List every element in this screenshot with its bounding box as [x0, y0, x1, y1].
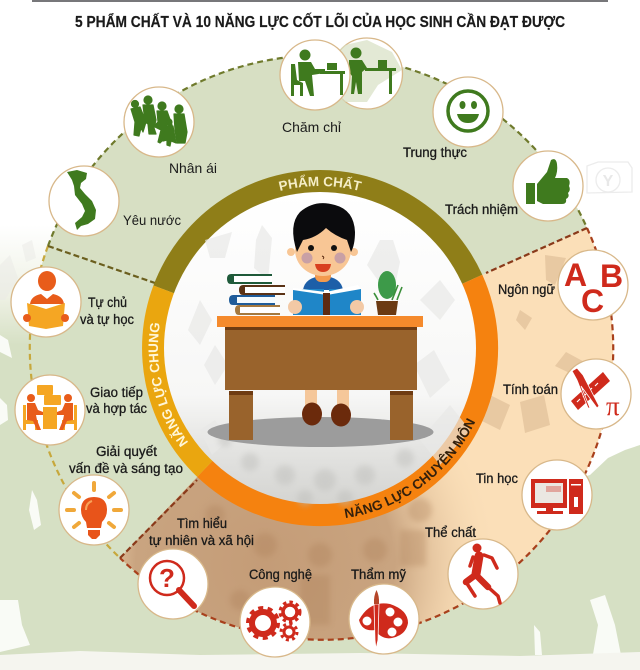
ring segment: phẩm chất — [153, 170, 482, 348]
label: chăm chỉ: Chăm chỉ — [282, 119, 342, 135]
dashed outer circle: red arc — [120, 228, 613, 640]
icon: nhân ái — [124, 87, 194, 157]
sector dividers — [48, 228, 587, 558]
icon: trung thực — [433, 77, 503, 147]
icon: giao tiếp và hợp tác — [15, 375, 85, 445]
label: tự chủ và tự học: Tự chủ — [88, 295, 127, 310]
sector: năng lực chuyên môn (specialised competencies) — [120, 228, 613, 640]
icon: giải quyết vấn đề (light bulb) — [59, 475, 129, 545]
watermark — [587, 162, 632, 193]
ring label: năng lực chung: NĂNG LỰC CHUNG — [148, 323, 188, 448]
dashed outer circle: green arc — [48, 55, 587, 246]
label: yêu nước: Yêu nước — [123, 212, 181, 228]
desk shadow — [208, 417, 434, 447]
label: thể chất: Thể chất — [425, 525, 476, 540]
title: 5 PHẨM CHẤT VÀ 10 NĂNG LỰC CỐT LÕI CỦA HỌC SINH CẦN ĐẠT ĐƯỢC — [75, 11, 565, 31]
label: giao tiếp và hợp tác: và hợp tác — [86, 401, 147, 416]
sector: năng lực chung (general competencies) — [30, 246, 320, 558]
label: tìm hiểu tự nhiên và xã hội: Tìm hiểu — [177, 516, 227, 531]
label: giao tiếp và hợp tác: Giao tiếp — [90, 385, 143, 400]
plant — [374, 271, 402, 315]
label: giải quyết vấn đề và sáng tạo — [69, 444, 183, 476]
icon: công nghệ (gears) — [240, 587, 310, 657]
icon: tự chủ và tự học — [11, 267, 81, 337]
inner background caps — [188, 225, 470, 465]
icon: ngôn ngữ (ABC): B — [600, 258, 623, 294]
icon: tính toán (ruler, compass and pi): π — [606, 391, 620, 421]
icon: thể chất (runner) — [448, 539, 518, 609]
top rule — [32, 0, 608, 2]
icon: chăm chỉ, left student — [280, 40, 350, 110]
crowd inside the circle — [218, 433, 414, 506]
label: tự chủ và tự học: và tự học — [80, 312, 134, 327]
icon: tìm hiểu (magnifier with question mark) — [138, 549, 208, 619]
label: giao tiếp và hợp tác — [86, 385, 147, 416]
boy and desk illustration — [217, 203, 423, 440]
label: tìm hiểu tự nhiên và xã hội — [149, 516, 254, 548]
label: giải quyết vấn đề và sáng tạo: Giải quyết — [96, 444, 157, 459]
label: giải quyết vấn đề và sáng tạo: vấn đề và sáng tạo — [69, 461, 183, 476]
label: công nghệ: Công nghệ — [249, 567, 312, 582]
label: thẩm mỹ: Thẩm mỹ — [351, 567, 406, 582]
icon: yêu nước (map of Vietnam) — [49, 166, 119, 236]
icon: thẩm mỹ (palette and brush) — [349, 584, 419, 654]
sector: phẩm chất (qualities) — [48, 55, 587, 348]
label: trung thực: Trung thực — [403, 145, 467, 160]
ring segment: năng lực chuyên môn — [197, 275, 498, 526]
icon: ngôn ngữ (ABC): C — [581, 283, 604, 319]
label: tính toán: Tính toán — [503, 382, 558, 397]
label: tự chủ và tự học — [80, 295, 134, 327]
label: nhân ái: Nhân ái — [169, 160, 217, 176]
icon: ngôn ngữ (ABC): A — [564, 257, 587, 293]
icon: ngôn ngữ (ABC) — [558, 250, 628, 320]
ring segment: năng lực chung — [142, 286, 320, 477]
icon: tính toán (ruler, compass and pi) — [561, 359, 631, 429]
icon: tin học (computer) — [522, 460, 592, 530]
icon: chăm chỉ, right student — [330, 38, 402, 109]
label: tin học: Tin học — [476, 471, 518, 486]
icon: trách nhiệm — [513, 151, 583, 221]
inner circle — [164, 192, 476, 504]
books stack — [227, 274, 285, 315]
label: trách nhiệm: Trách nhiệm — [445, 202, 518, 217]
ring label: năng lực chuyên môn: NĂNG LỰC CHUYÊN MÔN — [344, 418, 476, 518]
label: ngôn ngữ: Ngôn ngữ — [498, 282, 555, 297]
watermark: Y — [603, 173, 614, 190]
dashed outer circle: yellow arc — [30, 246, 120, 558]
boy — [287, 203, 364, 315]
ring label: phẩm chất: PHẨM CHẤT — [278, 174, 362, 191]
label: tìm hiểu tự nhiên và xã hội: tự nhiên và xã hội — [149, 533, 254, 548]
icon: tìm hiểu (magnifier with question mark): ? — [159, 563, 175, 593]
